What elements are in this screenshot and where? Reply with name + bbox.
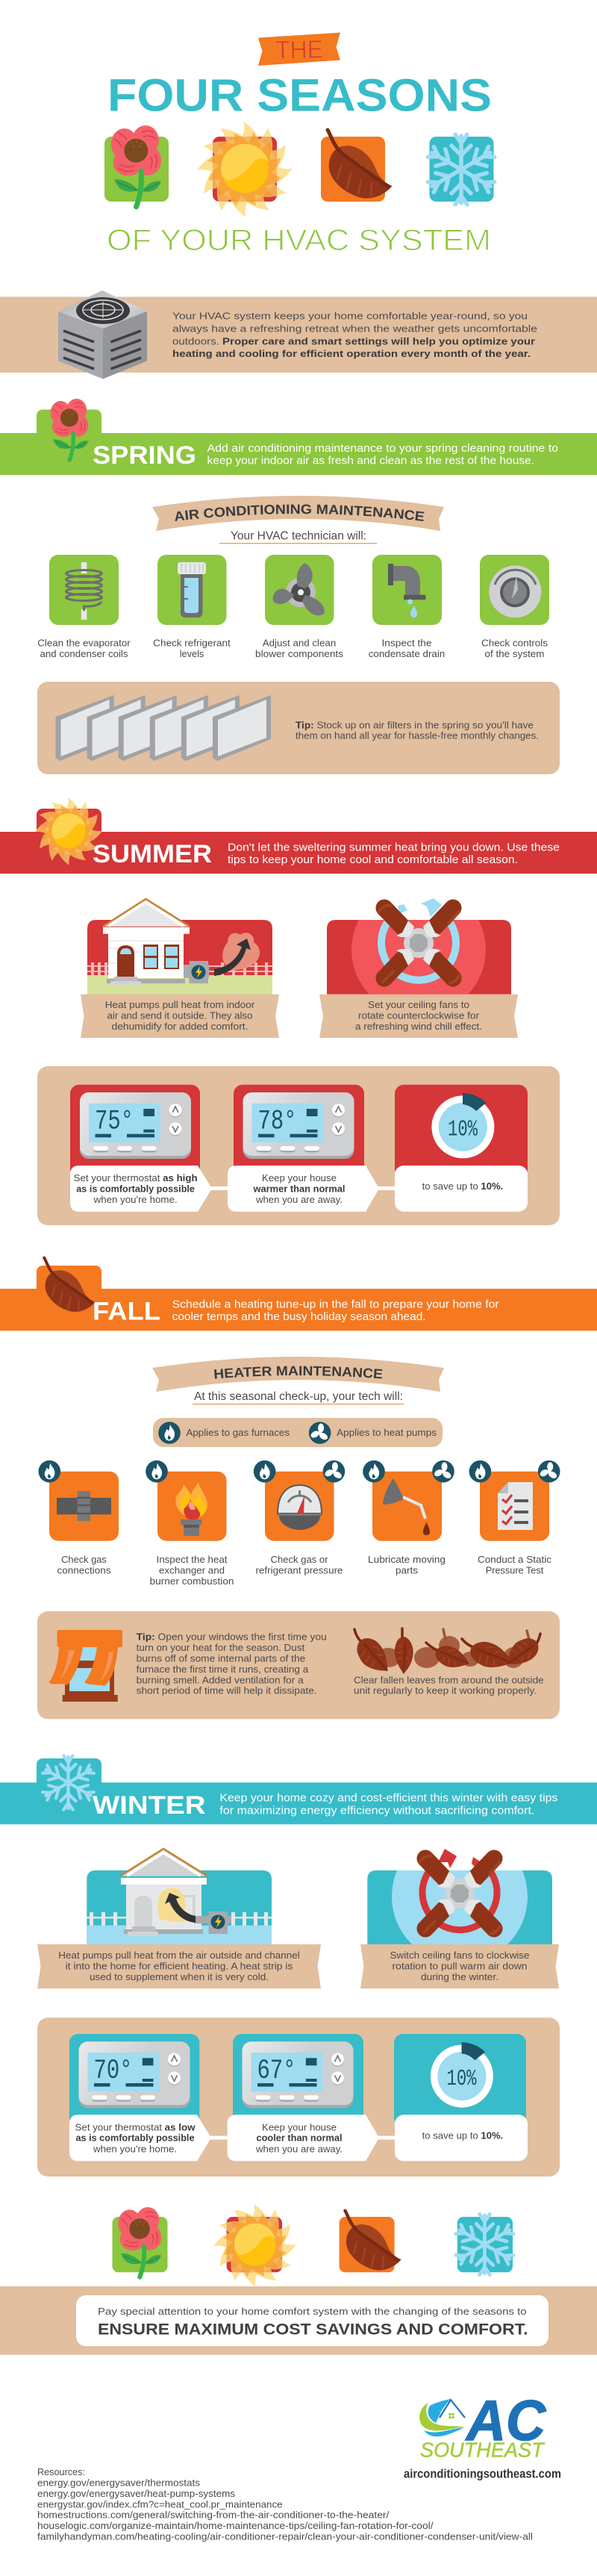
- text: filter tip: Tip: Stock up on air filters in the spring so you'll have: [296, 719, 534, 730]
- banner: air conditioning maintenance: AIR CONDITIONING MAINTENANCE: [175, 505, 424, 521]
- step: save up to 10%: [395, 1166, 528, 1212]
- ribbon: ceiling fan text: Set your ceiling fans to: [368, 999, 469, 1010]
- icon: stack of air filters: [55, 695, 271, 761]
- tile: system control dial: [480, 555, 549, 625]
- step: cooler than normal: cooler than normal: [257, 2132, 342, 2144]
- ribbon: heat pump text: air and send it outside. They also: [107, 1009, 252, 1021]
- step: as high as possible: when you're home.: [93, 1194, 178, 1205]
- icon: winter snowflake: [426, 134, 496, 205]
- icon: leaf: [340, 2211, 401, 2272]
- captions: fall maintenance: Inspect the heat: [157, 1554, 228, 1565]
- captions: spring maintenance: of the system: [485, 648, 545, 659]
- section header: spring: [0, 399, 597, 475]
- ribbon: winter heat pump text: Heat pumps pull heat from the air outside and channel: [58, 1950, 300, 1961]
- text: intro paragraph: [172, 311, 537, 359]
- step: as high as possible: [70, 1166, 212, 1212]
- connectors: [208, 2135, 398, 2140]
- icon: small snowflake: [41, 1755, 96, 1810]
- panel: summer heat pump house: [87, 898, 272, 995]
- panel: winter heat pump house: [87, 1849, 272, 1944]
- text: open windows tip: burns off of some internal parts of the: [137, 1652, 305, 1664]
- section header: summer: [0, 796, 597, 874]
- captions: fall maintenance: [57, 1554, 552, 1587]
- step: as low as possible: when you're home.: [93, 2143, 177, 2154]
- text: intro paragraph: heating and cooling for efficient operation every month of the year.: [172, 348, 531, 359]
- text: resources: energy.gov/energysaver/heat-pump-systems: [37, 2488, 236, 2499]
- text: resources: homestructions.com/general/switching-from-the-air-conditioner-to-the-heater/: [37, 2510, 390, 2521]
- step: warmer than normal: Keep your house: [262, 1172, 337, 1183]
- icon: summer sun: [196, 120, 294, 219]
- panel: summer thermostat settings: [37, 1066, 560, 1225]
- icon: spring flower: [104, 125, 169, 207]
- step: cooler than normal: Keep your house: [262, 2121, 337, 2132]
- ribbon: THE: [258, 33, 340, 66]
- captions: fall maintenance: exchanger and: [159, 1565, 225, 1576]
- tile: pressure gauge: [254, 1460, 345, 1541]
- section header: fall: [0, 1258, 597, 1331]
- card: thermostat 67: [233, 2034, 363, 2127]
- ribbon: winter heat pump text: [37, 1944, 321, 1988]
- ribbon: winter heat pump text: used to supplement when it is very cold.: [90, 1971, 269, 1982]
- tile: gas connections: [39, 1460, 119, 1541]
- panel: winter thermostat settings: [37, 2017, 560, 2177]
- text: resources: energy.gov/energysaver/thermostats: [37, 2477, 201, 2489]
- tile: condensate drain: [372, 555, 442, 625]
- icon: air conditioner unit: [58, 290, 147, 379]
- text: summer description: [228, 841, 560, 866]
- ribbon: THE: THE: [275, 35, 323, 65]
- arrow: heat flowing in: [165, 1893, 196, 1923]
- panel: air filter tip: [37, 682, 560, 774]
- tile: pressure test checklist: [469, 1460, 560, 1541]
- text: winter description: [219, 1793, 557, 1817]
- panel: summer ceiling fan: [327, 898, 511, 995]
- text: website: airconditioningsoutheast.com: [404, 2467, 561, 2481]
- footer icons: four seasons: [112, 2203, 515, 2288]
- card: thermostat 67: 67°: [257, 2056, 296, 2087]
- banner: heater maintenance: [152, 1357, 444, 1392]
- captions: spring maintenance: Inspect the: [382, 638, 431, 649]
- card: thermostat 78: [234, 1085, 364, 1178]
- captions: fall maintenance: burner combustion: [149, 1575, 234, 1587]
- icon: ceiling fan: [419, 1856, 500, 1934]
- ribbon: ceiling fan text: rotate counterclockwise for: [358, 1009, 480, 1021]
- text: resources: energystar.gov/index.cfm?c=heat_cool.pr_maintenance: [37, 2498, 283, 2510]
- tile: evaporator coil: [49, 555, 119, 625]
- text: open windows tip: Tip: Open your windows the first time you: [137, 1631, 327, 1643]
- tile: oil can: [363, 1460, 454, 1541]
- step: as low as possible: Set your thermostat as low: [75, 2121, 196, 2132]
- fence: [87, 1912, 272, 1926]
- text: intro paragraph: Your HVAC system keeps your home comfortable year-round, so you: [172, 311, 528, 321]
- ribbon: winter ceiling fan text: [360, 1944, 559, 1988]
- ribbon: heat pump text: dehumidify for added comfort.: [112, 1021, 248, 1032]
- text: winter description: for maximizing energy efficiency without sacrificing comfort.: [219, 1805, 534, 1817]
- icon: warm airflow ring: [422, 1849, 497, 1930]
- text: spring description: [207, 443, 558, 467]
- captions: fall maintenance: Check gas: [61, 1554, 107, 1565]
- ribbon: winter ceiling fan text: rotation to pull warm air down: [393, 1961, 527, 1972]
- legend: gas furnaces and heat pumps: Applies to heat pumps: [337, 1427, 437, 1438]
- logo text: SOUTHEAST: SOUTHEAST: [420, 2439, 545, 2462]
- step: as low as possible: [69, 2115, 211, 2161]
- captions: spring maintenance: and condenser coils: [40, 648, 128, 659]
- icon: heat cloud: [222, 933, 260, 971]
- text: open windows tip: [137, 1631, 327, 1696]
- card: ten percent savings: 10%: [446, 2066, 477, 2092]
- panel: fall tips: [37, 1611, 560, 1719]
- text: intro paragraph: outdoors. Proper care and smart settings will help you optimize your: [172, 335, 535, 346]
- captions: fall maintenance: parts: [396, 1565, 419, 1576]
- subheading: your HVAC technician will: Your HVAC technician will:: [231, 530, 366, 543]
- heading: SUMMER: SUMMER: [93, 840, 212, 868]
- icon: warm air: [158, 1888, 194, 1922]
- icon: small leaf: [44, 1258, 96, 1312]
- captions: spring maintenance: Check controls: [481, 638, 548, 649]
- captions: fall maintenance: connections: [57, 1565, 111, 1576]
- legend: gas furnaces and heat pumps: [153, 1418, 443, 1447]
- captions: fall maintenance: Lubricate moving: [368, 1554, 446, 1565]
- text: fall description: cooler temps and the busy holiday season ahead.: [172, 1311, 426, 1323]
- text: open windows tip: furnace the first time it runs, creating a: [137, 1664, 309, 1675]
- panel: winter ceiling fan: [367, 1849, 552, 1944]
- captions: spring maintenance: [37, 638, 548, 659]
- icon: flower: [112, 2207, 167, 2277]
- captions: spring maintenance: Check refrigerant: [153, 638, 231, 649]
- fence: [87, 962, 272, 975]
- subtitle: of your HVAC system: OF YOUR HVAC SYSTEM: [107, 224, 491, 257]
- header: title block: [104, 33, 496, 257]
- icon: fallen leaves: [352, 1628, 542, 1674]
- step: warmer than normal: when you are away.: [255, 1194, 343, 1205]
- icon: house: [103, 898, 190, 985]
- step: save up to 10%: [395, 2115, 528, 2161]
- logo text: AC: AC: [465, 2389, 546, 2453]
- text: filter tip: them on hand all year for hassle-free monthly changes.: [296, 729, 539, 741]
- panel: closing message: ENSURE MAXIMUM COST SAVINGS AND COMFORT.: [98, 2321, 528, 2339]
- ribbon: winter ceiling fan text: Switch ceiling fans to clockwise: [390, 1950, 530, 1961]
- tile: blower fan: [265, 555, 334, 625]
- icon: fall leaf: [321, 130, 393, 202]
- panel: closing message: Pay special attention to your home comfort system with the changing of the seasons to: [98, 2306, 527, 2317]
- panel: intro band: [0, 290, 597, 379]
- captions: fall maintenance: Check gas or: [270, 1554, 328, 1565]
- text: open windows tip: short period of time will help it dissipate.: [137, 1685, 317, 1696]
- legend: gas furnaces and heat pumps: Applies to gas furnaces: [187, 1427, 290, 1438]
- captions: fall maintenance: Pressure Test: [486, 1565, 544, 1576]
- heading: FALL: FALL: [93, 1298, 160, 1326]
- captions: fall maintenance: Conduct a Static: [478, 1554, 552, 1565]
- card: ten percent savings: [394, 2034, 526, 2127]
- text: clear leaves: [354, 1674, 544, 1696]
- icon: heat pump unit: [184, 961, 209, 983]
- card: thermostat 70: 70°: [94, 2056, 133, 2087]
- step: warmer than normal: [228, 1166, 379, 1212]
- step: save up to 10%: to save up to 10%.: [422, 2130, 503, 2141]
- icon: airflow ring: [381, 898, 456, 980]
- text: intro paragraph: always have a refreshing retreat when the weather gets uncomfortable: [172, 323, 537, 334]
- icon: open window with curtains: [49, 1630, 122, 1702]
- section header: winter: [0, 1755, 597, 1824]
- text: resources: familyhandyman.com/heating-cooling/air-conditioner-repair/clean-your-air-conditioner-condenser-unit/view-all: [37, 2530, 533, 2542]
- icon: winter house: [120, 1849, 207, 1936]
- ribbon: winter heat pump text: it into the home for efficient heating. A heat strip is: [66, 1961, 293, 1972]
- text: fall description: Schedule a heating tune-up in the fall to prepare your home for: [172, 1299, 499, 1311]
- text: winter description: Keep your home cozy and cost-efficient this winter with easy tips: [219, 1793, 557, 1805]
- text: filter tip: [296, 719, 539, 741]
- ribbon: heat pump text: [81, 995, 279, 1038]
- card: thermostat 75: 75°: [95, 1107, 134, 1138]
- icon: sun: [212, 2203, 298, 2288]
- card: thermostat 78: 78°: [258, 1107, 297, 1138]
- text: clear leaves: Clear fallen leaves from around the outside: [354, 1674, 544, 1685]
- heading: SPRING: SPRING: [93, 441, 196, 470]
- step: cooler than normal: when you are away.: [255, 2143, 343, 2154]
- banner: air conditioning maintenance: [152, 496, 444, 531]
- step: cooler than normal: [228, 2115, 379, 2161]
- icon: small flower: [51, 399, 88, 460]
- card: thermostat 70: [69, 2034, 199, 2127]
- spring maintenance icons: [49, 555, 549, 625]
- icon: heat pump unit: [194, 1911, 231, 1934]
- text: clear leaves: unit regularly to keep it working properly.: [354, 1685, 537, 1696]
- step: as high as possible: Set your thermostat as high: [74, 1172, 198, 1183]
- card: ten percent savings: [395, 1085, 528, 1178]
- captions: fall maintenance: refrigerant pressure: [255, 1565, 343, 1576]
- heading: WINTER: WINTER: [93, 1791, 206, 1820]
- card: ten percent savings: 10%: [448, 1117, 478, 1143]
- text: spring description: Add air conditioning maintenance to your spring cleaning routine to: [207, 443, 558, 455]
- fall maintenance icons: [39, 1460, 560, 1541]
- captions: spring maintenance: Clean the evaporator: [37, 638, 131, 649]
- icon: snowflake: [454, 2214, 515, 2275]
- text: resources: [37, 2466, 533, 2542]
- text: summer description: Don't let the sweltering summer heat bring you down. Use these: [228, 841, 560, 853]
- banner: heater maintenance: HEATER MAINTENANCE: [214, 1366, 382, 1378]
- subheading: seasonal check-up: At this seasonal check-up, your tech will:: [194, 1390, 403, 1403]
- arrow: heat flowing out: [214, 939, 251, 976]
- step: save up to 10%: to save up to 10%.: [422, 1180, 503, 1192]
- icon: logo house and swoosh: [419, 2399, 465, 2436]
- icon: small sun: [34, 796, 104, 866]
- panel: closing message: [0, 2286, 597, 2355]
- step: as low as possible: as is comfortably possible: [76, 2132, 194, 2144]
- text: resources: Resources:: [37, 2466, 85, 2477]
- ribbon: ceiling fan text: [319, 995, 518, 1038]
- step: as high as possible: as is comfortably possible: [76, 1183, 195, 1194]
- icon: ceiling fan: [378, 906, 459, 983]
- captions: spring maintenance: levels: [180, 648, 204, 659]
- logo: AC Southeast: [419, 2389, 546, 2462]
- captions: spring maintenance: Adjust and clean: [263, 638, 336, 649]
- captions: spring maintenance: condensate drain: [369, 648, 445, 659]
- ribbon: winter ceiling fan text: during the winter.: [421, 1971, 498, 1982]
- tile: heat exchanger flame: [146, 1460, 227, 1541]
- card: thermostat 75: [70, 1085, 200, 1178]
- captions: spring maintenance: blower components: [255, 648, 344, 659]
- ribbon: ceiling fan text: a refreshing wind chill effect.: [355, 1021, 482, 1032]
- text: open windows tip: turn on your heat for the season. Dust: [137, 1642, 305, 1653]
- title: FOUR SEASONS: FOUR SEASONS: [107, 70, 492, 121]
- step: warmer than normal: warmer than normal: [253, 1183, 345, 1194]
- text: resources: houselogic.com/organize-maintain/home-maintenance-tips/ceiling-fan-rotation-for-cool/: [37, 2520, 434, 2531]
- tile: refrigerant tube: [157, 555, 227, 625]
- text: summer description: tips to keep your home cool and comfortable all season.: [228, 854, 518, 866]
- ribbon: heat pump text: Heat pumps pull heat from indoor: [105, 999, 255, 1010]
- text: fall description: [172, 1299, 499, 1323]
- text: spring description: keep your indoor air as fresh and clean as the rest of the house.: [207, 455, 534, 467]
- text: open windows tip: burning smell. Added ventilation for a: [137, 1674, 304, 1685]
- connectors: [209, 1186, 398, 1190]
